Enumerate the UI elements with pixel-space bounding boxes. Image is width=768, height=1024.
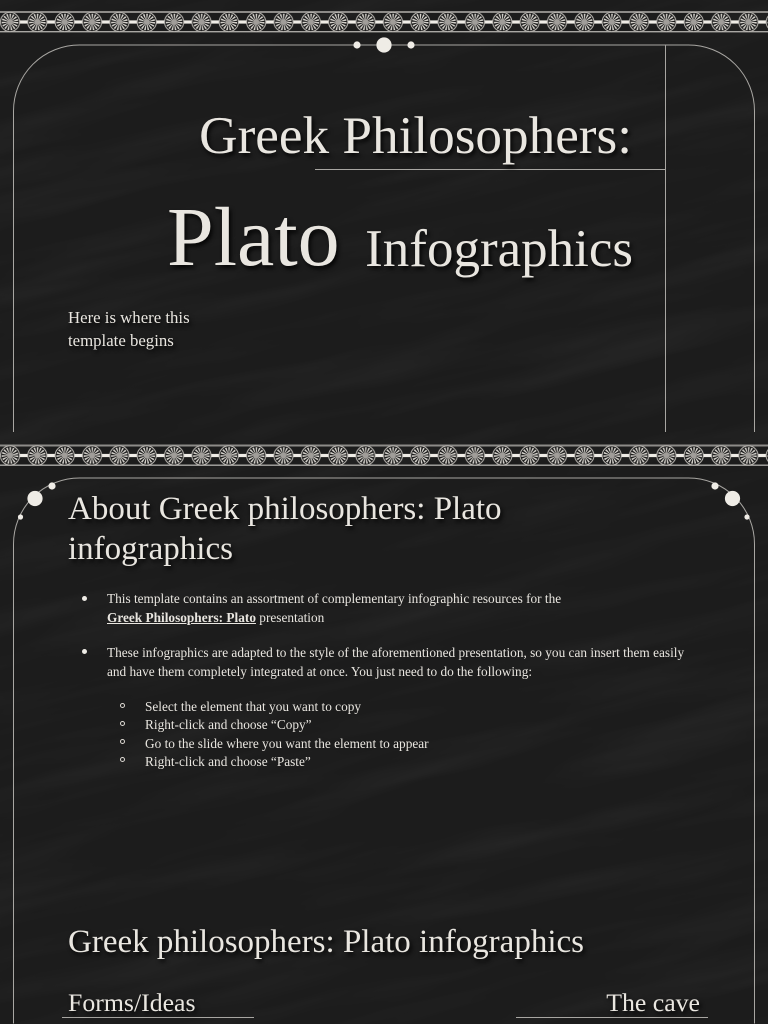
bullet 2: These infographics are adapted to the style of the aforementioned presentation, so you can insert them easily xyxy=(107,645,684,660)
subtitle xyxy=(68,308,190,350)
sub-list: Select the element that you want to copy xyxy=(145,699,361,714)
sub-list: Right-click and choose “Copy” xyxy=(145,717,312,732)
bullet 1: Greek Philosophers: Plato presentation xyxy=(107,610,324,624)
decorative band: middle xyxy=(0,444,768,466)
subtitle: Here is where this xyxy=(68,308,190,327)
label: Forms/Ideas: Forms/Ideas xyxy=(68,988,196,1017)
heading: plato infographics: Greek philosophers: Plato infographics xyxy=(68,924,584,960)
bullet 2 xyxy=(82,645,684,679)
heading: about: infographics xyxy=(68,531,233,567)
title: Infographics: Infographics xyxy=(365,220,633,278)
bullet list xyxy=(82,591,684,769)
subtitle: template begins xyxy=(68,331,174,350)
title: Plato: Plato xyxy=(167,191,340,284)
title slide frame xyxy=(14,45,754,432)
column underlines xyxy=(62,1016,708,1018)
about slide frame xyxy=(14,478,754,1024)
bullet 1: This template contains an assortment of complementary infographic resources for the xyxy=(107,591,561,606)
sub-list xyxy=(120,699,429,769)
sub-list: Right-click and choose “Paste” xyxy=(145,754,311,769)
sub-list: Go to the slide where you want the element to appear xyxy=(145,736,429,751)
decorative band: top xyxy=(0,11,768,33)
heading: about xyxy=(68,491,503,568)
bullet 2: and have them completely integrated at once. You just need to do the following: xyxy=(107,664,532,678)
about frame ornament dots xyxy=(18,482,750,520)
heading: about: About Greek philosophers: Plato xyxy=(68,491,502,527)
label: The cave: The cave xyxy=(606,988,700,1017)
title: Greek Philosophers: Greek Philosophers: xyxy=(199,106,632,165)
title frame ornament dots xyxy=(353,37,415,53)
bullet 1 xyxy=(82,591,561,625)
